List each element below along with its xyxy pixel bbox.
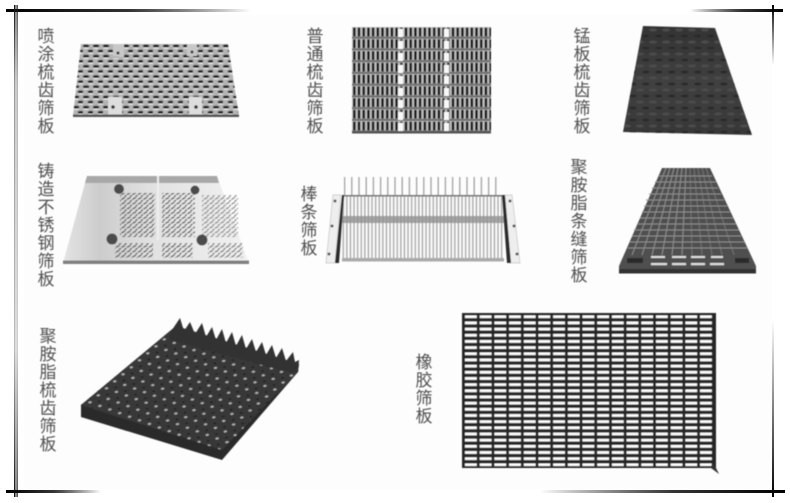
panel: 锰板梳齿筛板: [570, 26, 752, 135]
panel: 普通梳齿筛板: [304, 27, 491, 135]
panel: 棒条筛板: [298, 177, 520, 263]
plate image: bar screen: [326, 177, 520, 263]
panel: 橡胶筛板: [412, 313, 719, 474]
label: 铸造不锈钢筛板: 铸造不锈钢筛板: [34, 162, 54, 288]
plate image: ordinary comb plate: [352, 27, 491, 134]
label: 锰板梳齿筛板: 锰板梳齿筛板: [570, 27, 590, 135]
plate image: spray coated comb plate: [73, 44, 239, 117]
label: 普通梳齿筛板: 普通梳齿筛板: [304, 27, 323, 135]
panel: 喷涂梳齿筛板: [34, 27, 239, 135]
plate image: rubber plate: [462, 313, 719, 474]
label: 棒条筛板: 棒条筛板: [298, 185, 317, 257]
plate image: cast stainless plate: [63, 176, 249, 264]
plate image: polyurethane slot plate: [619, 168, 756, 274]
label: 橡胶筛板: 橡胶筛板: [412, 353, 432, 425]
panel: 聚胺脂条缝筛板: [568, 158, 756, 284]
plate image: manganese plate: [623, 26, 752, 135]
label: 聚胺脂梳齿筛板: 聚胺脂梳齿筛板: [36, 327, 56, 453]
panel: 聚胺脂梳齿筛板: [36, 318, 300, 460]
panel: 铸造不锈钢筛板: [34, 162, 249, 288]
plate image: polyurethane comb plate: [80, 318, 300, 460]
label: 喷涂梳齿筛板: 喷涂梳齿筛板: [34, 27, 54, 135]
label: 聚胺脂条缝筛板: 聚胺脂条缝筛板: [568, 158, 587, 284]
